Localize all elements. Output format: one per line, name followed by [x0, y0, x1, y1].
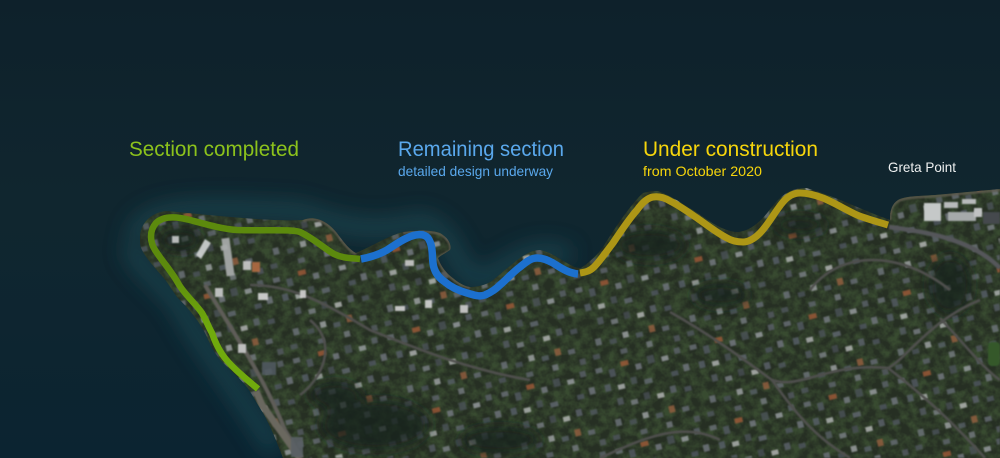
label: remaining section: Remaining section	[398, 138, 564, 161]
coastal shallows	[130, 209, 570, 450]
label: Greta Point: Greta Point	[888, 159, 956, 175]
roads	[205, 227, 1000, 458]
label: remaining section	[398, 138, 564, 179]
label: under construction: Under construction	[643, 138, 818, 161]
buildings: Greta Point	[924, 199, 1000, 224]
label: under construction: from October 2020	[643, 163, 762, 179]
grass patch	[988, 342, 1000, 366]
route: remaining section	[361, 235, 578, 296]
route: section completed	[151, 217, 360, 389]
label: remaining section: detailed design underway	[398, 163, 553, 179]
label: section completed: Section completed	[129, 138, 299, 161]
label: under construction	[643, 138, 818, 179]
route: under construction	[580, 193, 888, 273]
seawall sand	[303, 190, 1000, 288]
satellite map infographic	[122, 140, 1000, 458]
bush patches	[158, 215, 972, 454]
land	[130, 180, 1000, 458]
housing texture	[130, 180, 1000, 458]
buildings: left headland	[172, 236, 468, 457]
